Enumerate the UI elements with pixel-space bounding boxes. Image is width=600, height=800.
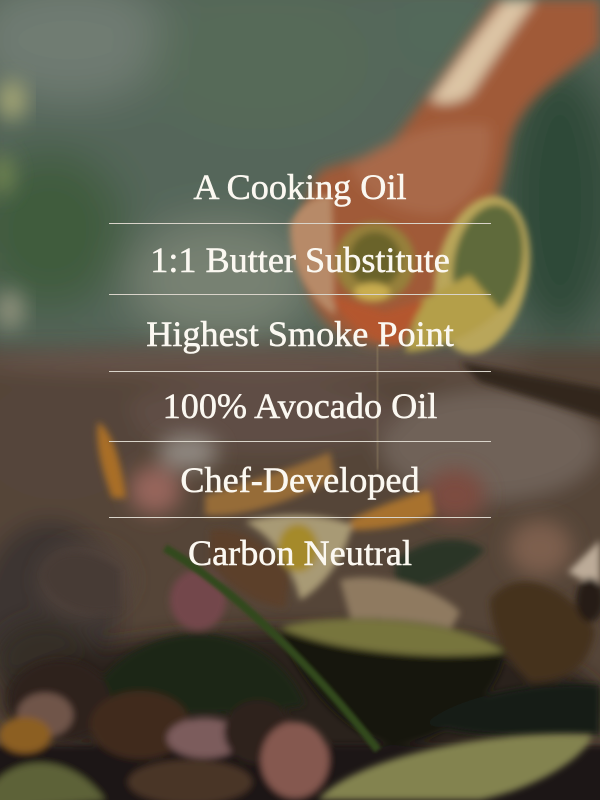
- pan: [0, 348, 600, 800]
- claim: smoke point: Highest Smoke Point: [146, 314, 454, 354]
- arm and hand: [304, 0, 600, 346]
- claim: a cooking oil: A Cooking Oil: [193, 167, 407, 207]
- claim: carbon neutral: Carbon Neutral: [188, 533, 412, 573]
- claim: chef-developed: Chef-Developed: [180, 460, 420, 500]
- foliage backdrop: [0, 0, 600, 360]
- claim: avocado oil: 100% Avocado Oil: [163, 386, 437, 426]
- food pile, blurred layer: [0, 434, 600, 770]
- pan rim: [460, 362, 600, 425]
- avocado slice in foreground: [318, 734, 592, 800]
- green bean: [165, 548, 378, 750]
- oil bottle: [290, 187, 544, 363]
- claim: butter substitute: 1:1 Butter Substitute: [150, 240, 450, 280]
- text list: product claims: [109, 167, 491, 573]
- oil stream: [377, 345, 378, 470]
